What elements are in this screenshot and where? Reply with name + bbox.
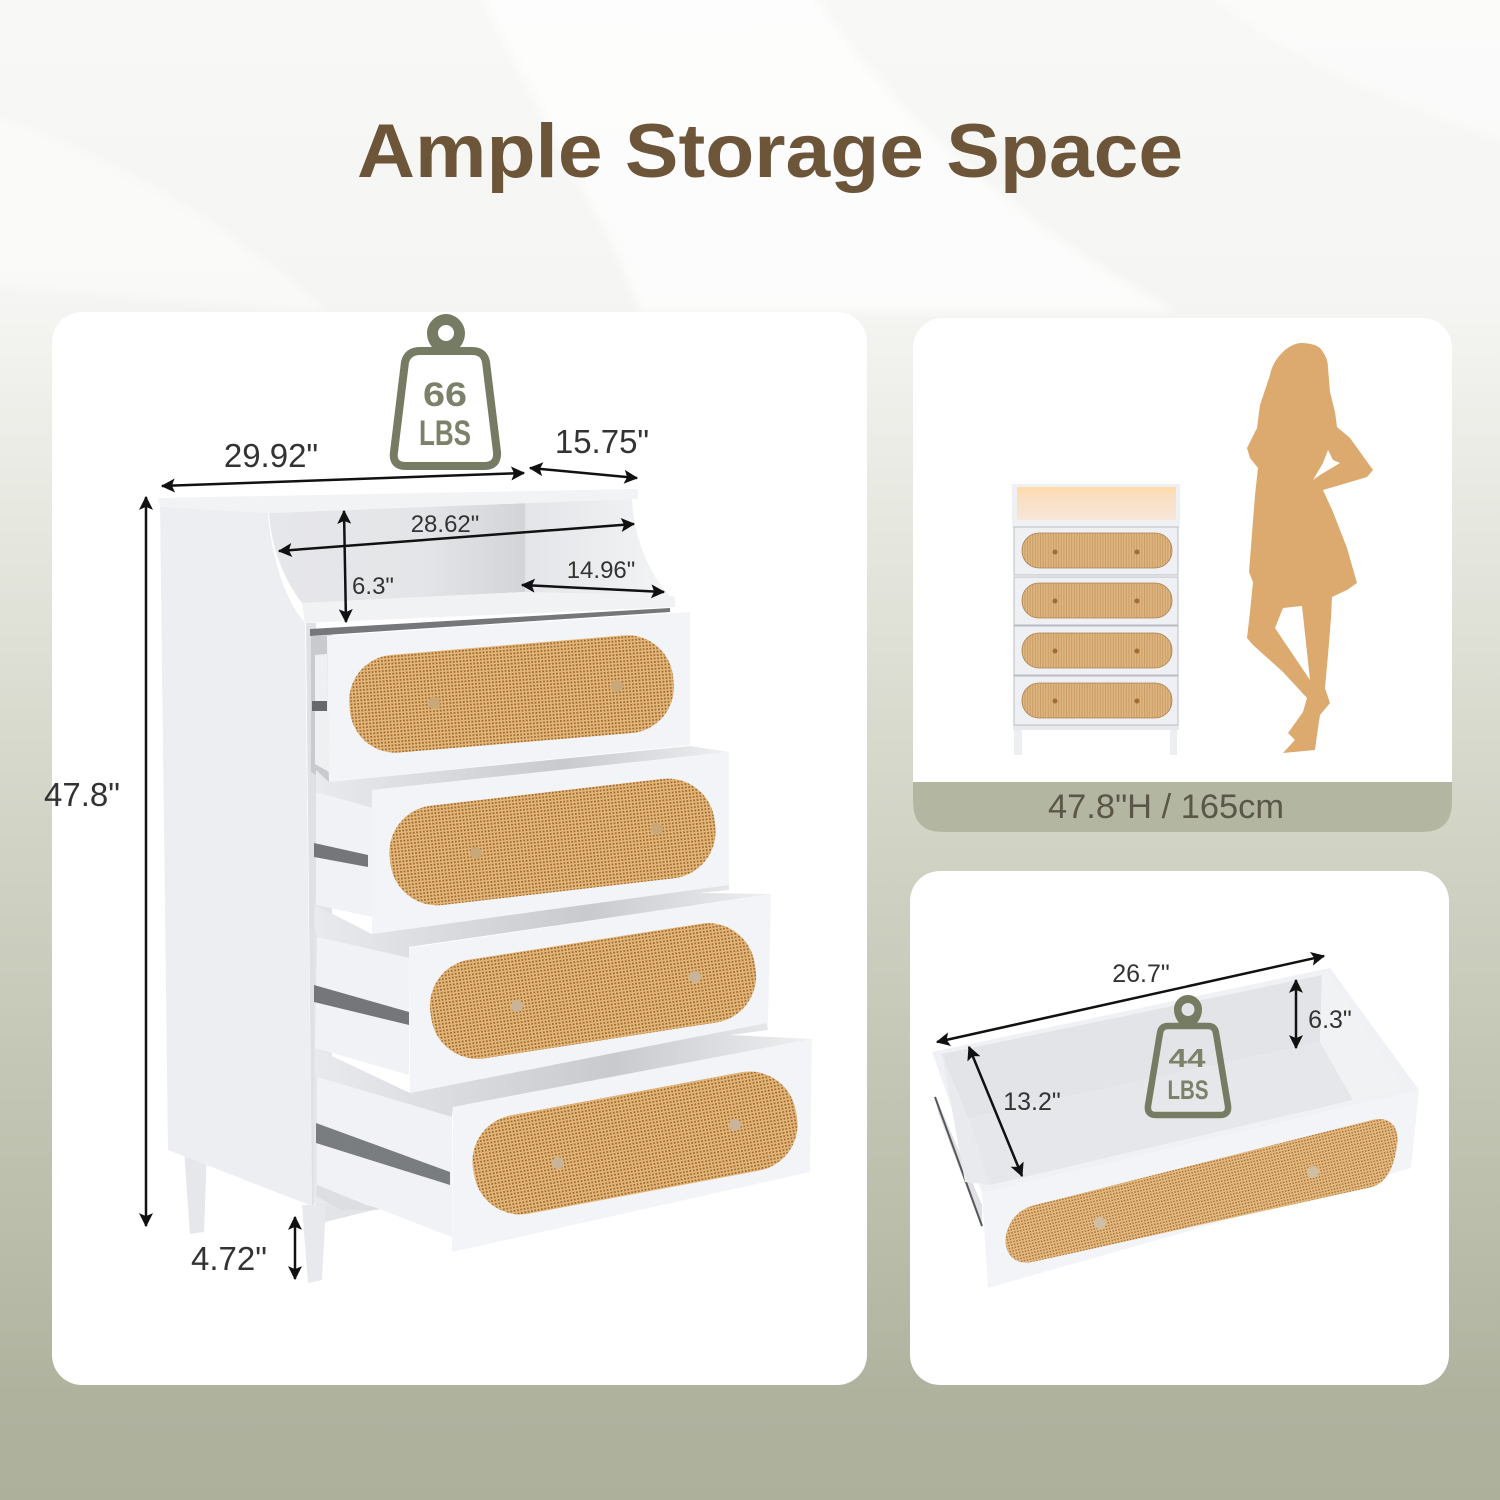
dimension: inner width 28.62 xyxy=(279,511,634,551)
dimension: inner height 6.3 xyxy=(344,511,394,622)
dimension: width 29.92 xyxy=(162,437,524,486)
cabinet interior strip xyxy=(314,630,332,1204)
dimension: inner depth 14.96: 14.96" xyxy=(567,557,635,584)
drawer rail xyxy=(935,1097,982,1226)
small dresser xyxy=(1012,484,1180,755)
cabinet inner column xyxy=(306,623,320,1206)
shelf back wall left xyxy=(269,503,525,603)
back wall xyxy=(942,975,1322,1118)
back leg xyxy=(184,1150,207,1234)
dimension: width 29.92: 29.92" xyxy=(224,437,318,474)
shelf back wall right xyxy=(525,499,670,596)
person silhouette xyxy=(1247,343,1373,753)
side panel xyxy=(160,506,312,1206)
dimension: drawer height 6.3 xyxy=(1296,980,1352,1048)
dimension: drawer length 26.7 xyxy=(937,956,1324,1042)
dimension: drawer length 26.7: 26.7" xyxy=(1112,960,1170,988)
single drawer xyxy=(932,968,1419,1288)
dimension: drawer depth 13.2: 13.2" xyxy=(1003,1088,1061,1116)
top board xyxy=(158,489,638,513)
panel: drawer dimensions xyxy=(910,871,1449,1385)
drawer outer side xyxy=(935,1095,982,1228)
right wall xyxy=(1320,972,1403,1100)
weight icon 44 lbs xyxy=(1148,995,1228,1115)
weight icon 44 lbs: 44 xyxy=(1168,1043,1206,1073)
height caption band xyxy=(913,782,1452,832)
cane panel xyxy=(1005,1119,1398,1263)
apron xyxy=(316,1195,382,1222)
dimension: inner depth 14.96 xyxy=(522,557,664,592)
dimension: inner height 6.3: 6.3" xyxy=(352,573,394,600)
dimension: drawer height 6.3: 6.3" xyxy=(1308,1006,1352,1034)
drawer rim xyxy=(932,968,1419,1193)
front leg xyxy=(302,1205,326,1283)
dimension: depth 15.75: 15.75" xyxy=(555,423,649,460)
dimension: depth 15.75 xyxy=(530,423,649,478)
weight icon 66 lbs xyxy=(394,314,497,466)
weight icon 66 lbs: LBS xyxy=(419,414,471,453)
dimension: leg 4.72 xyxy=(191,1217,295,1279)
title: Ample Storage Space xyxy=(357,109,1183,194)
front face xyxy=(982,1090,1419,1288)
dimension: height 47.8: 47.8" xyxy=(44,776,120,813)
panel: height comparison xyxy=(913,318,1452,832)
background light streaks xyxy=(0,0,1500,312)
shelf floor xyxy=(302,592,675,623)
floor xyxy=(968,1042,1353,1185)
dimension: leg 4.72: 4.72" xyxy=(191,1240,267,1277)
drawer 1 xyxy=(311,612,690,783)
dimension: drawer depth 13.2 xyxy=(969,1047,1061,1176)
weight icon 66 lbs: 66 xyxy=(423,376,467,414)
drawer 4 xyxy=(315,1023,812,1252)
height caption: 47.8"H / 165cm xyxy=(1048,788,1284,826)
weight icon 44 lbs: LBS xyxy=(1168,1075,1208,1105)
dresser with open drawers xyxy=(158,489,812,1283)
left wall xyxy=(942,1054,990,1185)
drawer 3 xyxy=(314,885,771,1093)
dimension: inner width 28.62: 28.62" xyxy=(411,511,479,538)
shelf shadow line xyxy=(310,608,670,636)
panel: main dresser dimensions xyxy=(44,312,867,1385)
drawer 2 xyxy=(314,746,729,934)
